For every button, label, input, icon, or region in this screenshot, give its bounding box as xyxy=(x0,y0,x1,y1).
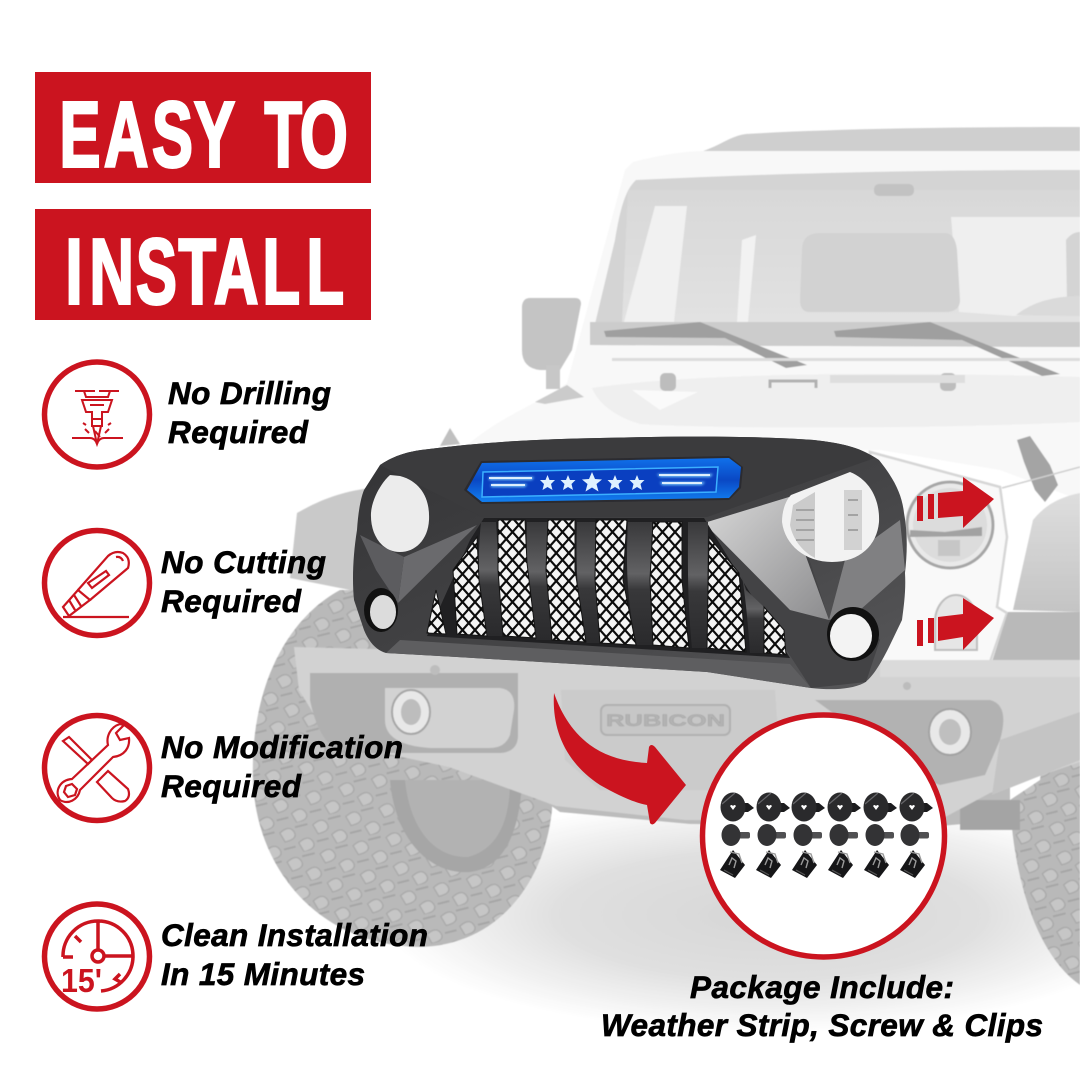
left cab window xyxy=(624,206,687,322)
right cab window xyxy=(951,217,1080,316)
stars xyxy=(540,472,644,492)
right lower opening xyxy=(827,607,879,661)
right body front panel xyxy=(870,452,1007,662)
white cab and hood xyxy=(465,151,1080,500)
small bumper bolts xyxy=(430,665,440,675)
jeep background photo xyxy=(240,127,1080,1033)
blue star light bar xyxy=(464,456,743,504)
label: no cutting: No Cutting xyxy=(161,544,326,580)
bumper left recess xyxy=(310,673,518,753)
left fog light xyxy=(392,690,430,734)
left lower opening xyxy=(364,588,398,632)
left fender flare xyxy=(290,488,400,600)
label: no cutting xyxy=(161,544,326,619)
label: no modification: No Modification xyxy=(161,729,403,765)
rear view mirror xyxy=(874,184,914,196)
undercarriage xyxy=(500,770,1010,826)
grille body xyxy=(353,437,907,689)
label: no drilling: Required xyxy=(168,414,309,450)
front seat xyxy=(800,233,960,312)
right fender flare xyxy=(1013,493,1080,612)
grille lower rail xyxy=(386,640,811,688)
grille center cavity xyxy=(427,518,790,658)
left wheel xyxy=(390,780,522,872)
label: clean installation: In 15 Minutes xyxy=(161,956,365,992)
icon: 15 minute clock xyxy=(44,904,150,1009)
heading: easy to: EASY TO xyxy=(60,83,348,187)
bumper xyxy=(294,647,1080,822)
icon: 15 minute clock: 15' xyxy=(61,962,102,999)
cowl band xyxy=(590,322,1080,347)
grille brow xyxy=(380,437,875,517)
icon: crossed tools xyxy=(44,716,150,820)
u-clips row xyxy=(720,850,925,878)
roof xyxy=(700,127,1080,160)
right wiper xyxy=(834,322,1060,376)
RUBICON badge xyxy=(601,705,730,735)
heading: install: INSTALL xyxy=(65,220,344,324)
grille right lower face xyxy=(704,497,880,688)
bumper right recess xyxy=(815,700,1003,785)
caption: package include: Weather Strip, Screw & Clips xyxy=(601,1007,1043,1043)
hood hinge xyxy=(1017,436,1058,502)
icon: drill xyxy=(44,362,150,467)
windshield glass xyxy=(622,190,1080,323)
label: clean installation xyxy=(161,917,428,992)
label: no modification: Required xyxy=(161,768,302,804)
grille xyxy=(353,437,907,689)
hood panel xyxy=(592,374,1080,428)
right engine bay xyxy=(990,612,1080,668)
curved red arrow to clips xyxy=(554,693,686,824)
screws row xyxy=(722,824,929,846)
right fog light xyxy=(929,709,971,755)
red arrow to turn signal xyxy=(917,598,994,650)
windshield frame xyxy=(590,170,1080,347)
mesh panels xyxy=(427,520,786,655)
ground shadow xyxy=(380,797,1080,1033)
grille right highlight facet xyxy=(704,497,829,620)
right turn signal xyxy=(935,595,977,650)
label: no drilling xyxy=(168,375,331,450)
left headlight opening xyxy=(371,475,429,552)
grille left facet xyxy=(398,525,477,603)
label: no cutting: Required xyxy=(161,583,302,619)
right tire xyxy=(1010,690,1080,985)
label: no modification xyxy=(161,729,403,804)
right headlight opening xyxy=(782,472,879,562)
left tire xyxy=(240,585,560,955)
icon: utility knife xyxy=(44,530,150,636)
left wiper xyxy=(604,322,807,368)
push rivets row xyxy=(720,792,933,822)
caption: package include: Package Include: xyxy=(690,969,954,1005)
right headlight xyxy=(907,482,993,568)
label: clean installation: Clean Installation xyxy=(161,917,428,953)
label: no drilling: No Drilling xyxy=(168,375,331,411)
bumper center plate xyxy=(561,690,781,790)
parts circle callout xyxy=(702,715,944,957)
caption: package include xyxy=(601,969,1043,1043)
RUBICON badge: RUBICON xyxy=(606,711,725,730)
vertical bars xyxy=(479,522,764,653)
red arrow to headlight xyxy=(917,477,994,528)
side mirror xyxy=(522,298,581,370)
